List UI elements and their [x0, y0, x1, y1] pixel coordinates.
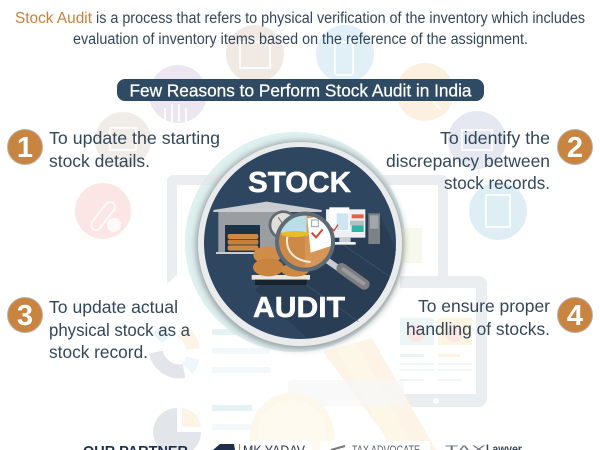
- number badge 4: [558, 298, 592, 332]
- number badge 1: 1: [17, 132, 33, 164]
- background: icon circles: [75, 25, 527, 240]
- reason 1: [8, 128, 220, 171]
- reason 2 text: [386, 128, 550, 193]
- reason 3 text: To update actual: [49, 297, 178, 317]
- reason 3 text: physical stock as a: [49, 320, 190, 340]
- computer and documents: [326, 207, 380, 245]
- shadow lines: [307, 245, 390, 322]
- number badge 4: 4: [567, 300, 583, 332]
- lens: [277, 213, 335, 270]
- background: gray panel: [288, 380, 404, 406]
- badge illustration: [213, 202, 390, 322]
- partner strip: [83, 441, 522, 450]
- background: seal: [250, 393, 334, 450]
- badge title: stock: STOCK: [248, 167, 351, 199]
- reason 4 text: handling of stocks.: [406, 319, 550, 339]
- magnifying glass: [277, 213, 364, 284]
- partner: tax lawyer: [445, 444, 522, 450]
- reason 2 text: discrepancy between: [386, 151, 550, 171]
- reason 4 text: To ensure proper: [418, 296, 550, 316]
- reason 3 text: stock record.: [49, 342, 148, 362]
- badge ring: [198, 142, 402, 346]
- reason 2 text: To identify the: [440, 128, 550, 148]
- background: teal circle: [185, 132, 405, 352]
- warehouse: [213, 202, 322, 254]
- long shadow: [256, 215, 396, 339]
- background: pie chart: [153, 408, 201, 450]
- background: teal bars: [212, 329, 270, 430]
- badge title: audit: AUDIT: [253, 292, 345, 324]
- number badge 3: 3: [17, 300, 33, 332]
- background: donut chart: [156, 331, 193, 371]
- background: monitor chart block: [395, 228, 422, 263]
- reason 3: [8, 297, 190, 362]
- number badge 2: [558, 130, 592, 164]
- reason 2: [386, 128, 592, 193]
- heading pill: Few Reasons to Perform Stock Audit in India: [130, 80, 472, 100]
- sacks: [252, 246, 310, 285]
- handle: [327, 260, 364, 284]
- reason 3 text: [49, 297, 190, 362]
- background: pencil: [323, 338, 436, 450]
- background: tablet: [400, 276, 487, 407]
- gauge: [270, 212, 297, 238]
- partner: tax advocate: [320, 441, 430, 450]
- reason 4 text: [406, 296, 550, 339]
- number badge 2: 2: [567, 132, 583, 164]
- central badge: stock audit: [196, 141, 420, 350]
- intro paragraph: Stock Audit: [15, 10, 93, 27]
- intro paragraph: [15, 10, 585, 48]
- reason 1 text: To update the starting: [49, 128, 220, 148]
- background: faded illustration: [75, 25, 527, 450]
- badge disc: [204, 147, 396, 339]
- reason 4: [406, 296, 592, 339]
- number badge 3: [8, 298, 42, 332]
- partner: mk yadav: [200, 441, 312, 450]
- number badge 1: [8, 130, 42, 164]
- reason 2 text: stock records.: [444, 173, 550, 193]
- reason 1 text: stock details.: [49, 151, 150, 171]
- reason 1 text: [49, 128, 220, 171]
- badge shadow: [196, 141, 404, 349]
- intro paragraph: evaluation of inventory items based on the reference of the assignment.: [73, 31, 528, 48]
- background: monitor frame: [167, 175, 448, 284]
